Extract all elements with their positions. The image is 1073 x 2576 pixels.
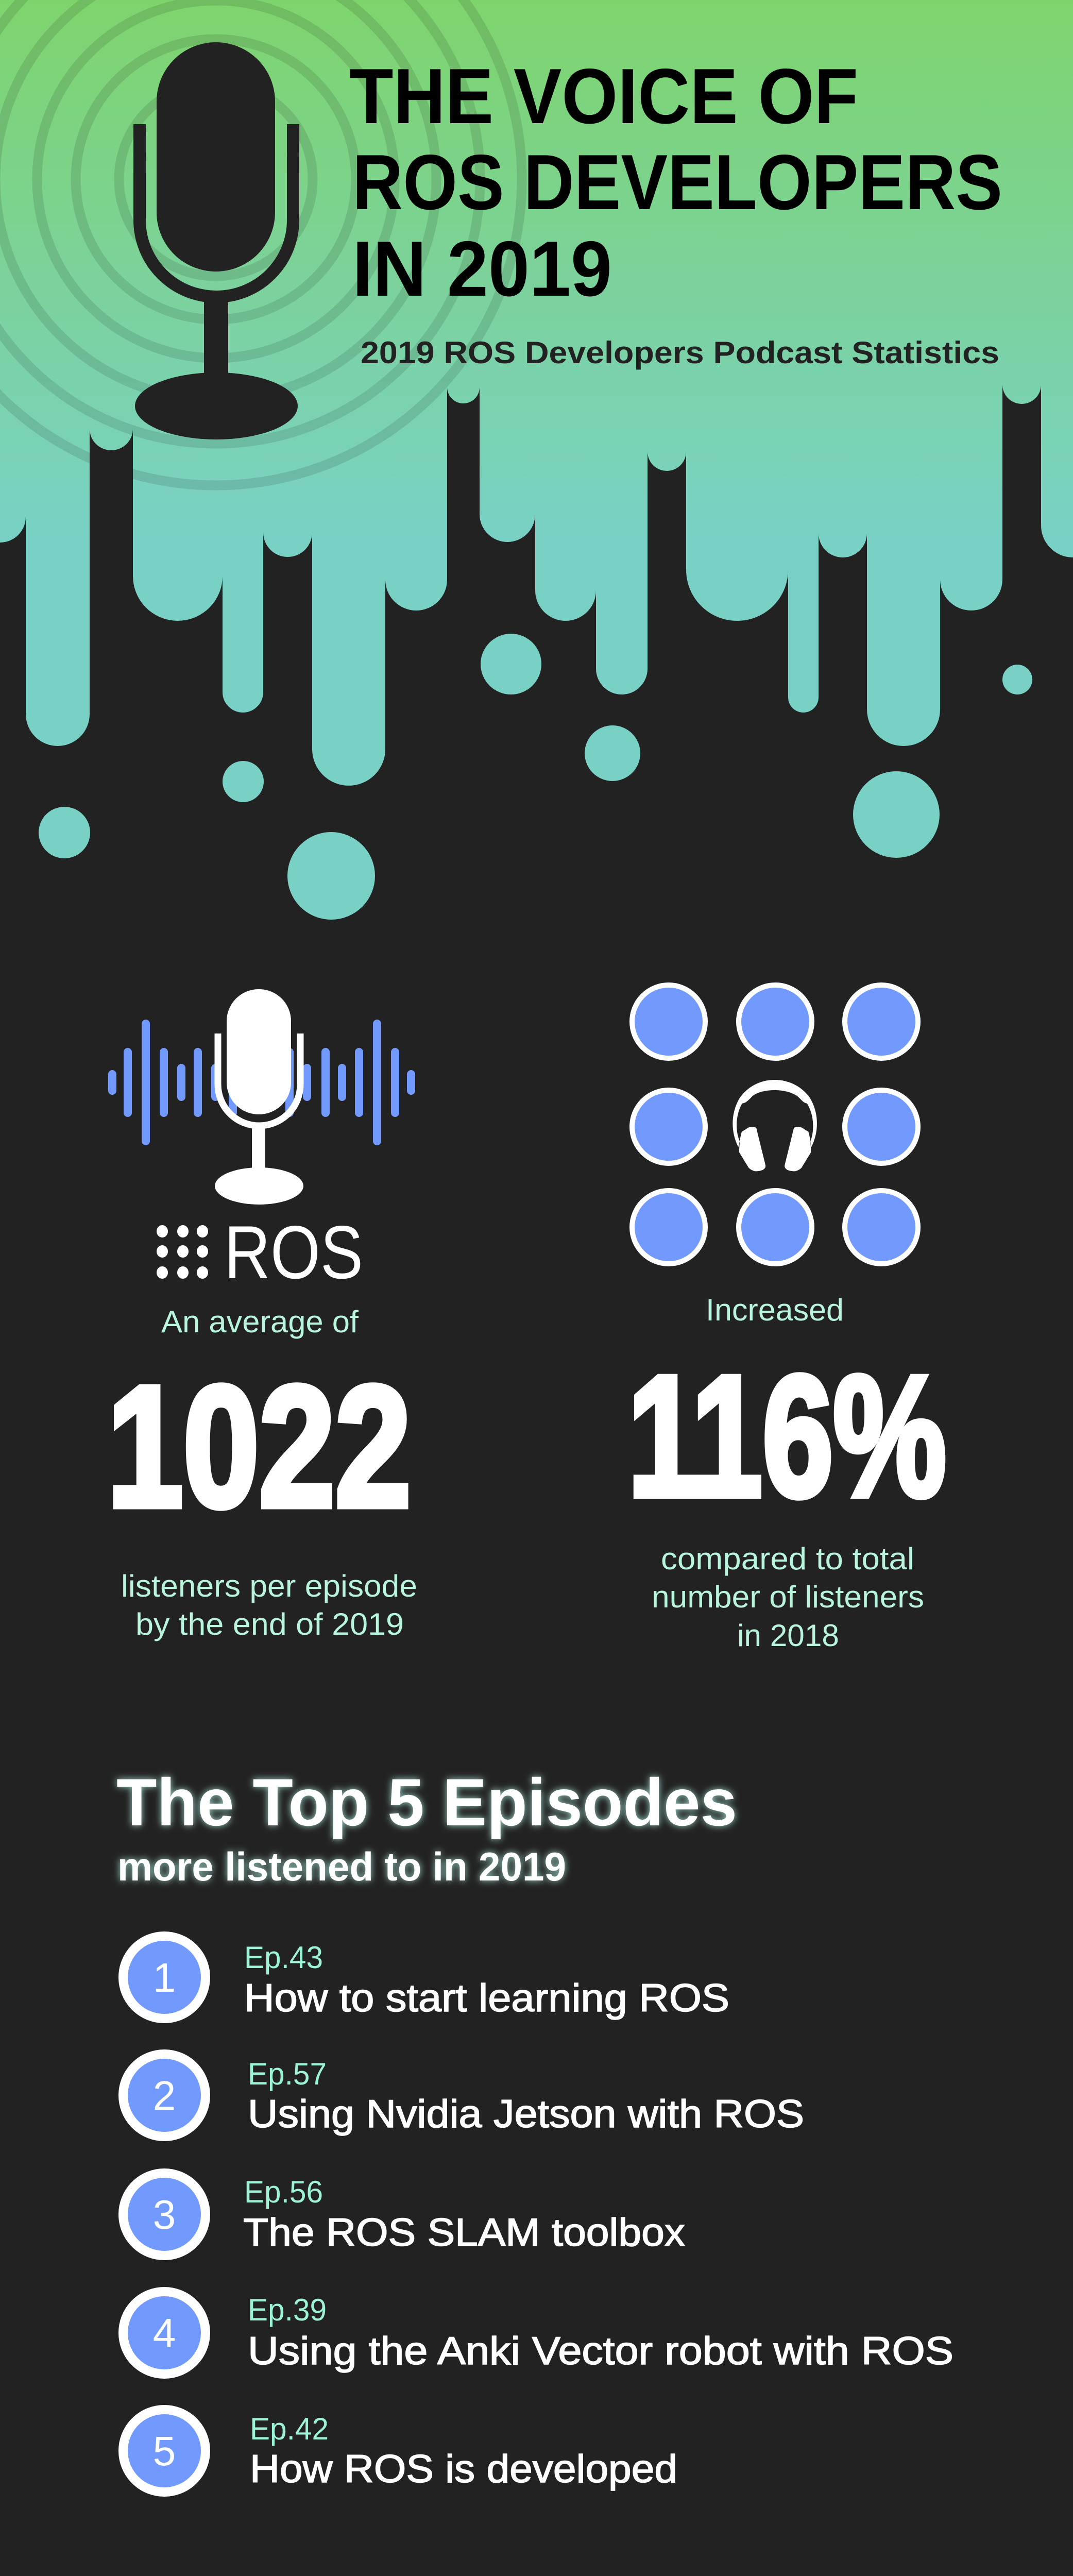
episode 4: 4 [153, 2310, 176, 2356]
heading [116, 1765, 737, 1889]
description text: compared to total [661, 1541, 914, 1576]
description text: by the end of 2019 [135, 1607, 404, 1641]
episode 1: Ep.43 [244, 1940, 323, 1975]
episode 5: Ep.42 [250, 2412, 329, 2446]
episode 5: 5 [153, 2428, 176, 2474]
icon: falling droplets [39, 634, 1032, 920]
episode 4: Ep.39 [248, 2293, 327, 2327]
intro text: An average of [161, 1304, 359, 1339]
episode 1: 1 [153, 1955, 176, 2001]
episode 3: Ep.56 [244, 2175, 323, 2209]
episode 3 [123, 2173, 685, 2256]
intro text: Increased [706, 1293, 844, 1327]
heading: The Top 5 Episodes [116, 1765, 737, 1840]
icon: large microphone [135, 42, 298, 439]
description text [652, 1541, 924, 1653]
panel: top 5 episodes [116, 1765, 953, 2492]
episode 2: 2 [153, 2073, 176, 2119]
panel: header with dripping gradient [0, 0, 1073, 920]
title [349, 53, 1002, 313]
episode 1 [123, 1936, 729, 2020]
episode 3: 3 [153, 2192, 176, 2238]
icon: white microphone [215, 989, 303, 1205]
episode 1: How to start learning ROS [244, 1976, 729, 2020]
ROS logo [157, 1210, 363, 1294]
description text: number of listeners [652, 1580, 924, 1614]
episode 3: The ROS SLAM toolbox [243, 2211, 685, 2255]
episode 4: Using the Anki Vector robot with ROS [248, 2329, 953, 2373]
title: IN 2019 [352, 225, 612, 313]
icon: grid of blue dots [632, 985, 918, 1264]
panel: average listeners stat [107, 989, 417, 1641]
big number 1022: 1022 [107, 1350, 411, 1543]
icon: sound wave bars [112, 1024, 411, 1141]
episode 2 [123, 2054, 804, 2137]
title: THE VOICE OF [349, 53, 858, 140]
dripping gradient shape [0, 0, 1073, 786]
episode 2: Ep.57 [248, 2057, 327, 2091]
episode 2: Using Nvidia Jetson with ROS [248, 2092, 804, 2136]
subtitle: 2019 ROS Developers Podcast Statistics [361, 335, 999, 370]
episode 5 [123, 2410, 677, 2492]
heading: more listened to in 2019 [117, 1844, 566, 1889]
ROS logo: ROS [224, 1210, 363, 1294]
title: ROS DEVELOPERS [352, 139, 1002, 226]
panel: listeners increase stat [628, 985, 946, 1653]
icon: headphones [733, 1080, 817, 1171]
description text: listeners per episode [121, 1569, 417, 1603]
episode 4 [123, 2292, 953, 2374]
big number 116%: 116% [628, 1340, 946, 1532]
description text: in 2018 [737, 1618, 839, 1653]
description text [121, 1569, 417, 1641]
concentric sound rings [0, 0, 522, 485]
episode 5: How ROS is developed [250, 2447, 677, 2491]
